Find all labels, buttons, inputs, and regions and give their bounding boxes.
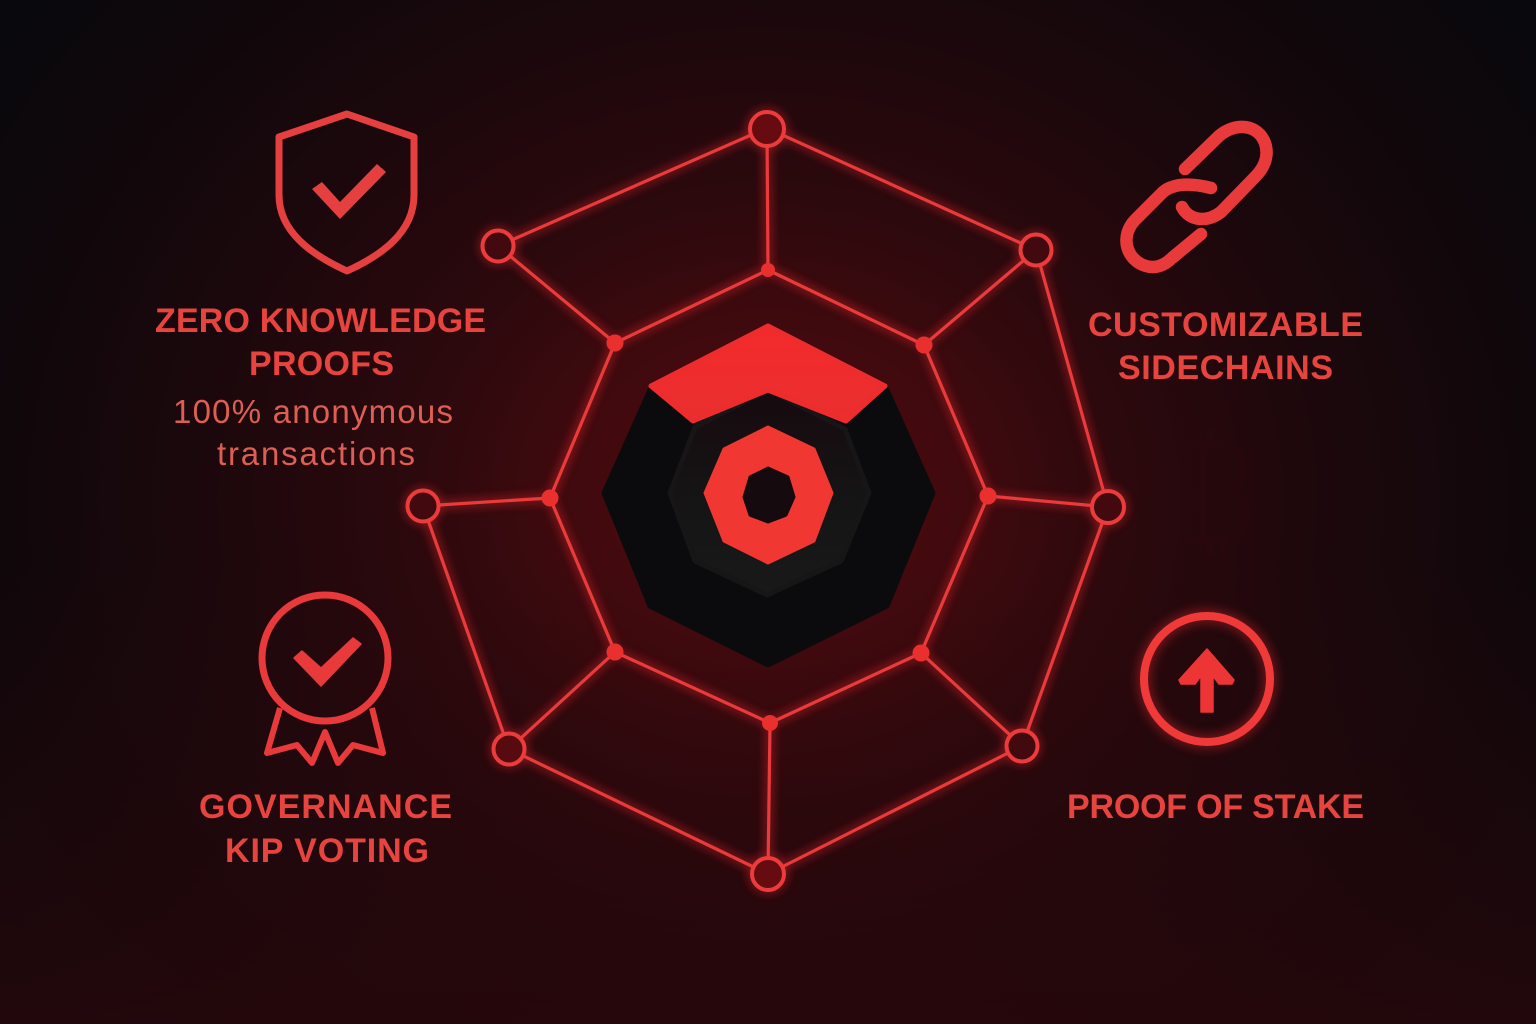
heading: customizable sidechains: CUSTOMIZABLE <box>1088 306 1363 344</box>
inner nodes <box>542 263 996 731</box>
heading: proof of stake: PROOF OF STAKE <box>1067 788 1364 826</box>
panel: proof of stake <box>1067 616 1364 826</box>
heading: zero knowledge proofs: PROOFS <box>249 345 394 383</box>
logo inner ring <box>670 390 869 595</box>
logo dark octagon <box>604 390 933 665</box>
outer ring lines <box>423 128 1108 874</box>
icon: badge with check <box>262 595 388 763</box>
heading: zero knowledge proofs <box>155 302 486 383</box>
logo red ring <box>705 427 832 563</box>
heading: governance kip voting: KIP VOTING <box>225 832 429 870</box>
panel: customizable sidechains <box>1088 127 1363 387</box>
logo top chevron <box>651 326 885 421</box>
icon: arrow in circle <box>1144 616 1270 742</box>
logo hole <box>744 468 794 522</box>
heading: customizable sidechains <box>1088 306 1363 387</box>
heading: governance kip voting: GOVERNANCE <box>199 788 452 826</box>
central logo <box>604 326 933 665</box>
panel: zero knowledge proofs <box>155 114 486 472</box>
description: anonymous transactions <box>173 393 453 472</box>
icon: shield with check <box>279 114 414 271</box>
icon: chain link <box>1126 127 1267 267</box>
spokes <box>423 128 1108 874</box>
network lines <box>423 128 1108 874</box>
outer nodes <box>408 112 1124 890</box>
heading: governance kip voting <box>199 788 452 870</box>
description: anonymous transactions: transactions <box>217 435 415 472</box>
description: anonymous transactions: 100% anonymous <box>173 393 453 430</box>
heading: zero knowledge proofs: ZERO KNOWLEDGE <box>155 302 486 340</box>
panel: governance <box>199 595 452 870</box>
heading: customizable sidechains: SIDECHAINS <box>1118 349 1333 387</box>
inner ring lines <box>550 270 988 723</box>
network diagram glow <box>408 112 1124 890</box>
